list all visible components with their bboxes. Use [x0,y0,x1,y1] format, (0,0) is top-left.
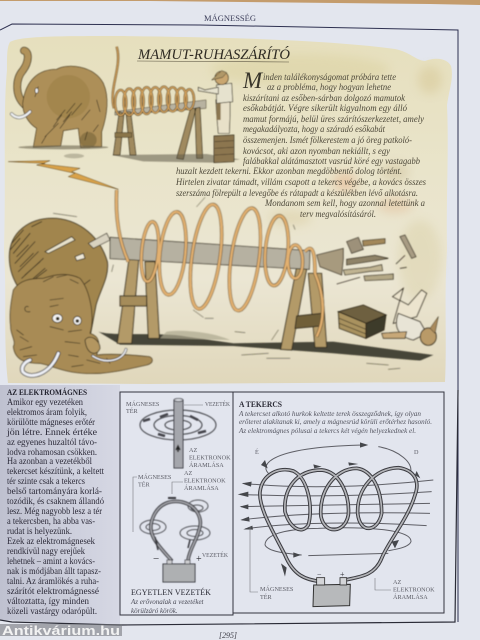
icon: drying frame with coil [113,47,206,159]
shadow under mammoth [18,145,108,149]
icon: looped wire with battery [140,498,210,582]
label: electron flow coil: AZ [393,579,401,586]
text block: electromagnet column: tekercset készítünk, a keltett [7,466,104,477]
motion marks [53,197,400,369]
watermark: Antikvárium.hu [2,624,120,638]
icon: flying tools [317,235,416,284]
panel border [120,392,233,615]
heading: coil: A TEKERCS [239,399,282,409]
text block: electromagnet column: szárítót elektromágnessé [7,586,99,597]
label: magnetic field: TÉR [126,407,139,415]
text block: electromagnet column: Ezek az elektromágnesek [7,536,95,547]
text block: electromagnet column: rendkívül nagy erejűek [7,546,85,557]
coil wire [260,468,417,582]
illustration: mammoth and drying frame [8,47,240,189]
metal bar [110,237,310,269]
battery terminals [317,578,347,585]
text block: story: kiszárítani az esőben-sárban dolgozó mamutok [243,93,406,104]
label: magnetic field 2: TÉR [138,480,151,488]
icon: straight wire [140,398,216,468]
text block: electromagnet column [6,387,104,617]
text block: electromagnet column: rudat is helyezünk. [7,526,72,537]
label: magnetic field coil: TÉR [260,593,273,601]
frame shadow [112,154,240,163]
coil turns [116,190,323,337]
label: electron flow 2: AZ [184,470,192,477]
icon: fallen blacksmith [382,288,438,345]
text block: story: összemenjen. Ismét fölkerestem a jó öreg patkoló- [243,135,412,146]
leader line coil flow [375,578,391,590]
text block: electromagnet column: Ha azonban a vezetékből [7,456,92,467]
label: electron flow coil: ÁRAMLÁSA [393,593,428,601]
label: magnetic field coil: MÁGNESES [260,585,294,593]
label: north pole: D [414,449,419,456]
text block: story: falábakkal alátámasztott vasrúd köré egy vastagabb [243,156,420,167]
text block: electromagnet column: körülötte mágneses erőtér [7,417,96,428]
icon: standing mammoth [12,51,107,148]
heading: story title: MAMUT-RUHASZÁRÍTÓ [137,46,290,63]
text block: electromagnet column: jön létre. Ennek értéke [6,427,97,438]
text block: story: kovácsot, aki azon nyomban nekiállt, s egy [243,147,391,157]
label: electron flow 2: ÁRAMLÁSA [184,484,219,492]
icon: crate [214,135,234,163]
icon: stuck mammoth [9,218,152,375]
label: wire 2: VEZETÉK [202,551,228,559]
arrowheads [238,442,420,577]
caption: single wire text: Az erővonalak a vezetéket [130,598,205,606]
caption: coil text: Az elektromágnes pólusai a tekercs két végén helyezkednek el. [238,426,416,435]
text block: story: esőkabátját. Végre sikerült kigyalnom egy álló [243,103,407,114]
stains [210,54,442,300]
text block: story: mamut formájú, belül üres szárítószerkezetet, amely [243,114,425,125]
battery [313,584,350,607]
text block: electromagnet column: lesz. Még nagyobb lesz a tér [7,506,103,517]
text block: story [175,68,426,220]
text block: story: inden találékonyságomat próbára tette [263,73,396,83]
label: plus sign: + [196,554,202,565]
label: minus sign: − [153,553,159,565]
panel: parchment story [4,36,452,384]
shadows [98,332,433,361]
label: electron flow: ÁRAMLÁSA [189,461,224,469]
leader line [184,404,203,406]
text block: electromagnet column: talni. Az áramlökés a ruha- [7,576,99,587]
table edge strip [0,0,480,5]
label: electron flow coil: ELEKTRONOK [393,586,435,594]
group: blurred artwork [8,47,438,375]
text block: electromagnet column: belső tartományára korlá- [7,486,102,497]
text block: story: terv megvalósításáról. [300,210,376,220]
leader line 2 [133,477,137,532]
text block: electromagnet column: nak is módjában állt tapasz- [7,566,101,577]
label: electron flow 2: ELEKTRONOK [184,478,226,484]
illustration: coil with field lines [238,442,433,607]
text block: story: szerszáma fölrepült a levegőbe és rátapadt a készülékben lévő alkotásra. [176,188,418,199]
left text column shading [0,385,120,625]
text block: electromagnet column: az egyenes huzaltól távo- [7,437,97,448]
text block: story: az a probléma, hogy hogyan lehetne [267,83,391,93]
label: south pole: É [255,448,259,456]
icon: blacksmith [198,71,233,133]
text block: electromagnet column: tozódik, és csaknem állandó [7,496,104,507]
panel: the coil [233,392,444,613]
parchment sheet [4,36,452,384]
text block: electromagnet column: lodva rohamosan csökken. [7,447,97,458]
text block: electromagnet column: lehetnek – amint a kovács- [7,556,95,567]
text block: story: megakadályozta, hogy a száradó esőkabát [243,124,385,135]
caption: single wire text: körülzáró körök. [131,607,178,615]
label: wire: VEZETÉK [205,400,230,408]
field lines [240,445,433,556]
label: minus: − [317,570,322,579]
page heading: MÁGNESSÉG [204,13,256,23]
text block: electromagnet column: elektromos áram folyik, [7,407,87,418]
illustration: electrified mammoth scene [9,190,438,375]
icon: crate on the ground [338,305,386,338]
text block: electromagnet column: változtatta, így minden [7,596,89,607]
caption: coil text: erőteret alakítanak ki, amely a mágnesrúd körüli erőtérhez hasonló. [239,417,432,426]
label: magnetic field: MÁGNESES [126,400,160,408]
text block: story: Hirtelen zivatar támadt, villám csapott a tekercs végébe, a kovács összes [175,178,426,188]
sawhorses [117,252,327,350]
text block: electromagnet column: közeli vastárgy odarópült. [7,606,97,617]
lightning bolt [8,161,118,189]
text block: electromagnet column: tér szinte csak a tekercs [7,476,85,487]
label: electron flow: AZ [189,447,197,454]
label: magnetic field 2: MÁGNESES [138,473,172,481]
leader line coil field [250,527,258,592]
text block: electromagnet column: a tekercsben, ha abba vas- [7,516,95,527]
text block: story: huzalt kezdett tekerni. Ekkor azonban megdöbbentő dolog történt. [176,166,402,177]
page number: [295] [219,631,237,640]
caption: coil text [238,409,432,435]
panel border [233,392,444,613]
bottom page frame [0,390,458,625]
text block: story: Mondanom sem kell, hogy azonnal letettünk a [264,199,425,209]
text block: electromagnet column: AZ ELEKTROMÁGNES [7,387,87,397]
label: plus: + [340,570,345,579]
caption: single wire heading: EGYETLEN VEZETÉK [131,587,211,597]
label: electron flow: ELEKTRONOK [189,454,231,462]
text block: story: M [242,68,264,93]
coil wire highlight [260,468,417,582]
text block: electromagnet column: Amikor egy vezetéken [7,397,83,408]
leader line 3 [172,482,183,494]
panel: single wire [120,392,233,615]
caption: coil text: A tekercset alkotó hurkok keltette terek összegződnek, így olyan [238,409,421,418]
